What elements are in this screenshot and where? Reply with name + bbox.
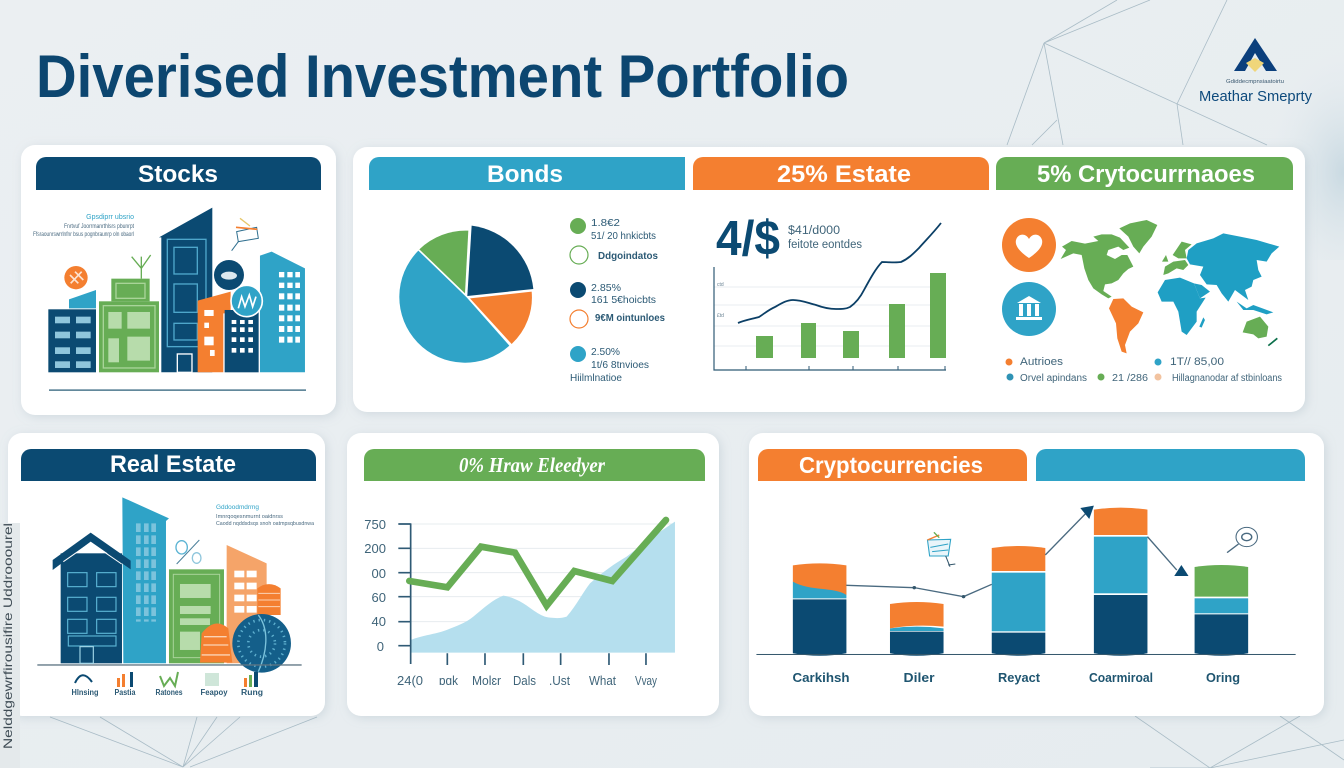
chart axis labels: Molɛr <box>472 673 502 688</box>
cryptocurrencies heading <box>758 449 1027 481</box>
icon: wallet cart <box>927 532 955 567</box>
logo: Gdiddecmpnsiaatoirtu <box>1226 79 1284 85</box>
crypto heading <box>996 157 1293 190</box>
bar labels: Carkihsh <box>792 670 850 685</box>
pie legend: 9€M ointunloes <box>595 312 665 324</box>
pie legend: 161 5€hoicbts <box>591 294 656 306</box>
map legend: Hillagnanodar af stbinloans <box>1172 373 1282 384</box>
icon: heart <box>1002 218 1056 272</box>
bonds heading <box>369 157 685 190</box>
chart axis labels: Dals <box>513 673 536 688</box>
chart axis labels: 750 <box>364 517 386 532</box>
real estate heading: Real Estate <box>110 451 236 478</box>
chart axis labels: Vvay <box>635 673 657 688</box>
cryptocurrencies heading: Cryptocurrencies <box>799 452 983 478</box>
chart axis labels <box>364 517 657 688</box>
real estate stat: 4/$ <box>716 212 780 266</box>
estate heading <box>693 157 989 190</box>
city skyline illustration <box>48 208 305 372</box>
real estate caption: Imnrqoqesnmurnt oaidnrss <box>216 514 283 520</box>
panel: real estate <box>8 433 325 716</box>
real estate heading <box>21 449 316 481</box>
chart axis labels: ɒɑk <box>439 673 458 688</box>
stocks heading: Stocks <box>138 161 218 188</box>
panel: cryptocurrencies <box>749 433 1324 716</box>
map legend: 1T// 85,00 <box>1170 356 1224 368</box>
pie chart <box>399 226 533 363</box>
icon: magnifier <box>1227 527 1257 553</box>
bar labels: Oring <box>1206 670 1240 685</box>
pie legend: 1t/6 8tnvioes <box>591 359 649 371</box>
chart axis labels: 0 <box>377 639 384 654</box>
stocks caption: Ffsraounrswrrlnfnr bsus pognbraunrp oln obaorl <box>33 232 134 238</box>
bar labels <box>792 670 1240 685</box>
chart axis labels: 24(0 <box>397 673 423 688</box>
real estate icons and labels: Hlnsing <box>72 688 99 697</box>
real estate chart <box>714 223 946 370</box>
pie legend: Ddgoindatos <box>598 250 658 262</box>
map legend: Orvel apindans <box>1020 373 1087 384</box>
stocks caption: Fnrtvuf Joorrmanrthlsrs pbunrpt <box>64 224 134 230</box>
blank blue heading <box>1036 449 1305 481</box>
bar labels: Reyact <box>998 670 1041 685</box>
housing illustration <box>37 497 302 673</box>
chart axis labels: 40 <box>372 614 386 629</box>
chart axis labels: What <box>589 673 616 688</box>
pie legend: 2.50% <box>591 346 620 358</box>
real estate icons and labels <box>72 672 263 697</box>
real estate icons and labels: Rung <box>241 688 263 697</box>
real estate stat: feitote eontdes <box>788 239 862 251</box>
bar labels: Coarmiroal <box>1089 670 1153 685</box>
crypto heading: 5% Crytocurrnaoes <box>1037 161 1255 188</box>
logo <box>1199 38 1312 105</box>
panel: bonds, real estate and crypto summary <box>353 147 1305 412</box>
side strip label <box>0 523 20 768</box>
stocks heading <box>36 157 321 190</box>
real estate caption: Gddoodmdrmg <box>216 504 259 511</box>
pie legend <box>570 217 665 384</box>
pie legend: 51/ 20 hnkicbts <box>591 230 656 242</box>
map legend: Autrioes <box>1020 356 1064 368</box>
growth heading <box>364 449 705 481</box>
bar labels: Diler <box>904 670 934 685</box>
real estate chart: £td <box>717 313 724 319</box>
chart axis labels: 200 <box>364 541 386 556</box>
growth heading: 0% Hraw Eleedyer <box>459 453 606 477</box>
bonds heading: Bonds <box>487 161 563 188</box>
chart axis labels: 00 <box>372 566 386 581</box>
stocks caption <box>33 214 134 238</box>
real estate icons and labels: Feapoy <box>200 688 228 697</box>
real estate chart: ctd <box>717 282 724 288</box>
stocks caption: Gpsdiprr ubsrio <box>86 214 134 221</box>
estate heading: 25% Estate <box>777 161 911 188</box>
panel: stocks <box>21 145 336 415</box>
stocks baseline <box>49 390 306 391</box>
real estate stat: $41/d000 <box>788 225 840 237</box>
icon: bank <box>1002 282 1056 336</box>
logo: Meathar Smeprty <box>1199 88 1312 105</box>
real estate caption <box>216 504 315 527</box>
trend arrows <box>846 506 1189 598</box>
title: Diverised Investment Portfolio <box>36 43 849 110</box>
map legend <box>1006 356 1282 384</box>
world map <box>1061 220 1279 353</box>
real estate icons and labels: Ratones <box>156 688 183 697</box>
area and line chart <box>398 520 675 665</box>
stacked bar chart <box>756 506 1296 656</box>
chart axis labels: 60 <box>372 590 386 605</box>
real estate caption: Caodd nqddsdsqs snoh oatmpsqbusdnwa <box>216 521 315 527</box>
pie legend: Hiilmlnatioe <box>570 372 622 384</box>
pie legend: 1.8€2 <box>591 217 620 229</box>
chart axis labels: .Ust <box>549 673 570 688</box>
real estate icons and labels: Pastia <box>114 688 136 697</box>
map legend: 21 /286 <box>1112 373 1148 384</box>
panel: growth line chart <box>347 433 719 716</box>
side strip label: Nelddgewrfirousifire Uddrooourel <box>1 523 15 749</box>
real estate stat <box>716 212 862 266</box>
pie legend: 2.85% <box>591 282 621 294</box>
